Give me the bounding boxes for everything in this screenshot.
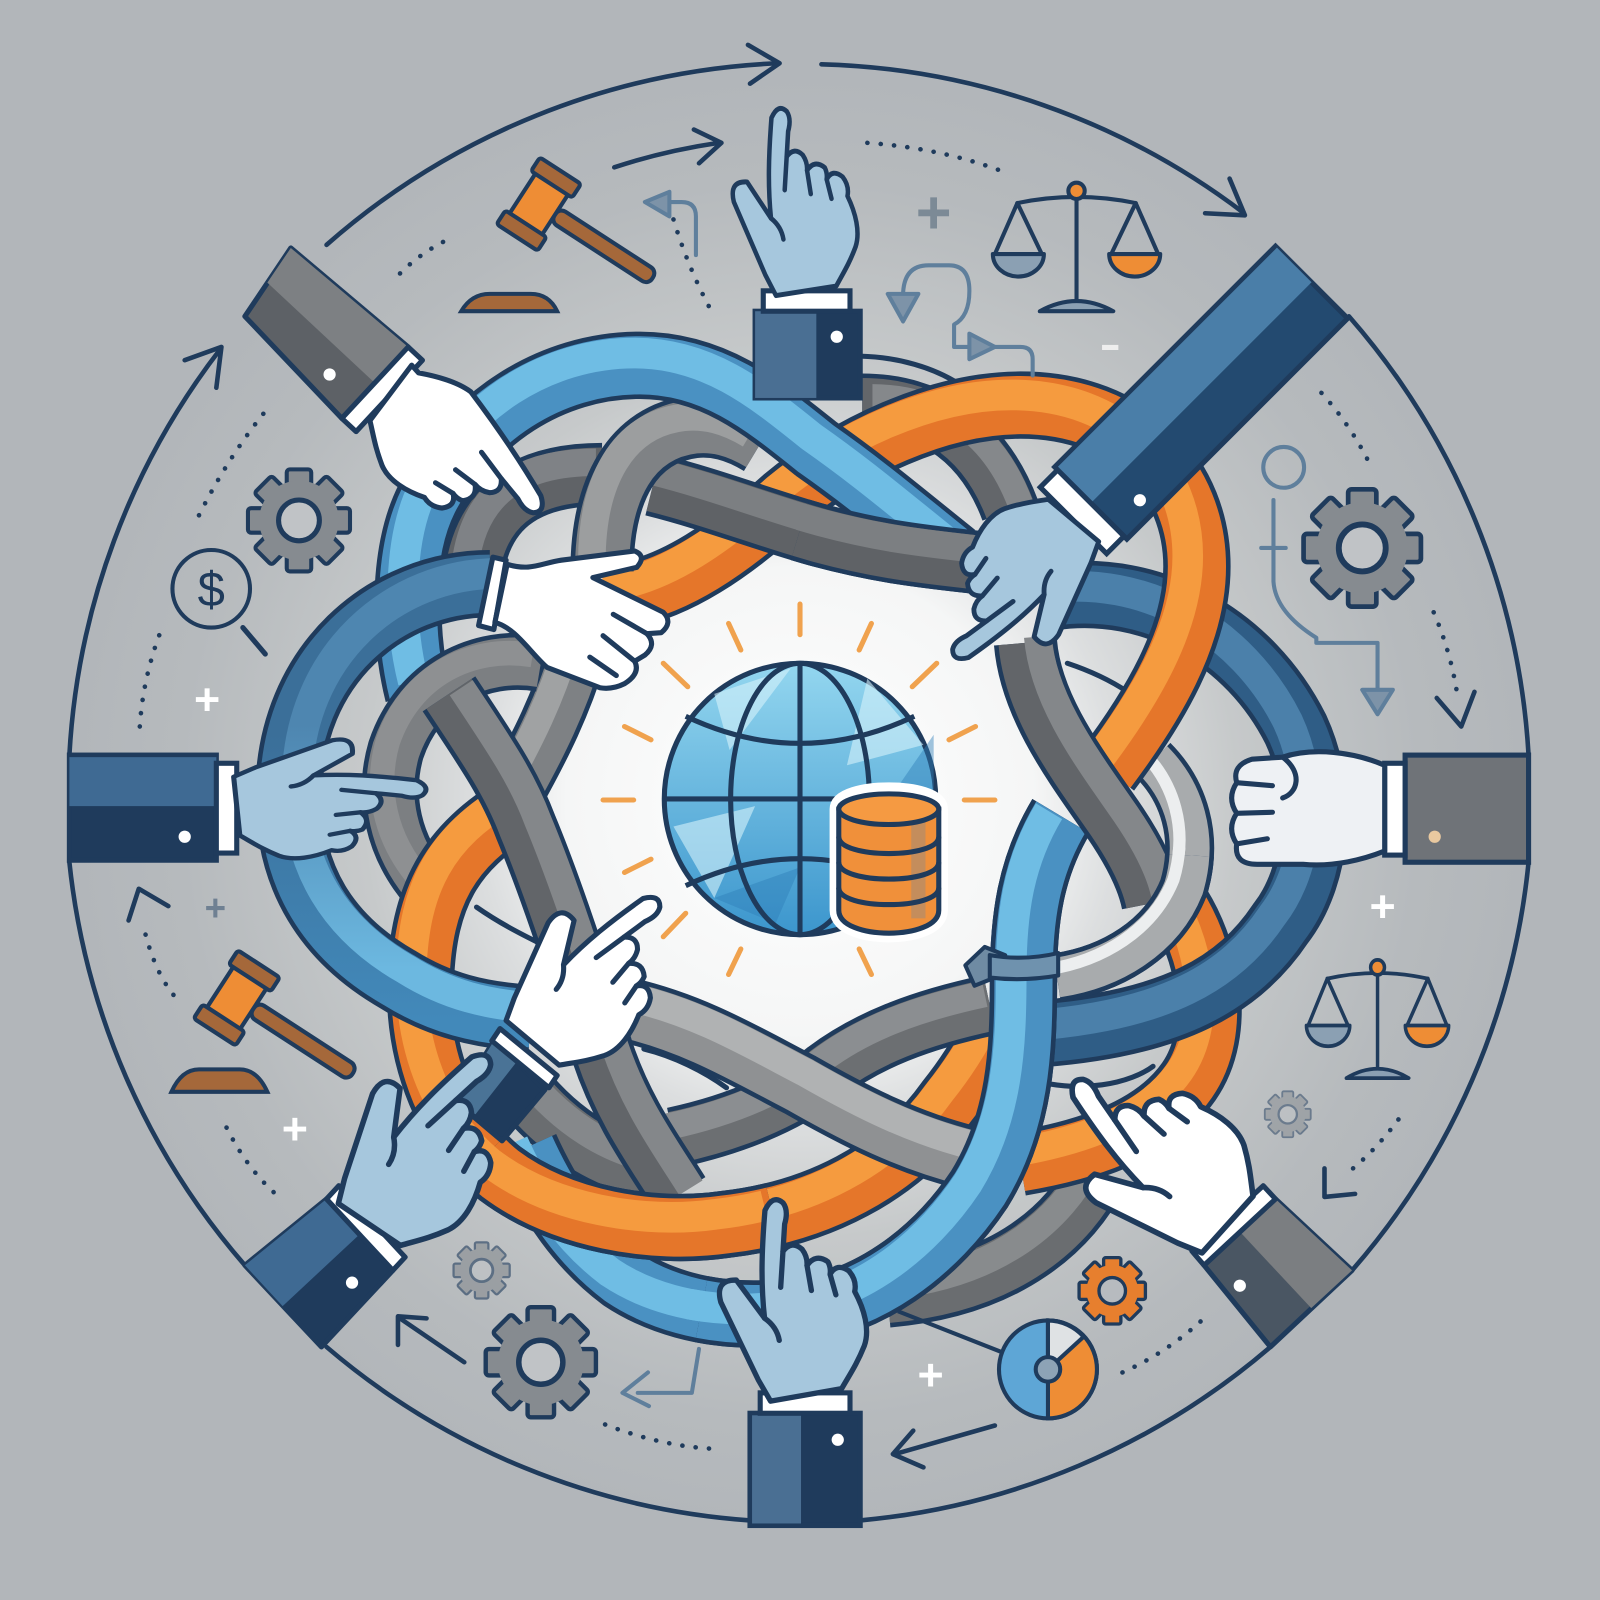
sleeve: left navy [69, 755, 237, 860]
icon: gavel top [461, 157, 674, 311]
sleeve: top navy [755, 291, 860, 398]
plus and minus marks: + [205, 887, 226, 928]
plus and minus marks: + [1370, 880, 1396, 931]
hand: top left white [350, 354, 572, 562]
sleeve: bottom navy [750, 1393, 860, 1526]
left grey strands [382, 648, 577, 888]
sleeve: bottom right grey [1192, 1186, 1352, 1347]
hand: upper left white with cuff [479, 551, 668, 688]
bottom right orange and dark blue strands [1011, 586, 1314, 1163]
back strands [465, 356, 1190, 1296]
icon: dollar magnifier [172, 550, 265, 654]
sleeve: right grey [1385, 755, 1529, 862]
hand: centre white [482, 855, 707, 1087]
dotted paths [140, 143, 1457, 1449]
globe [664, 663, 936, 935]
plus and minus marks [194, 179, 1396, 1400]
hand: bottom pale blue [705, 1188, 876, 1407]
plus and minus marks: + [916, 179, 952, 247]
sleeve: top left grey [245, 248, 422, 432]
plus and minus marks: + [918, 1349, 944, 1400]
icon: scales top [993, 183, 1160, 311]
small arrows [129, 130, 1474, 1467]
grey flow arrows [622, 192, 1393, 1406]
lower strands interlaced [289, 573, 1190, 1314]
hand: left pale blue [231, 731, 432, 864]
plus and minus marks: + [282, 1103, 308, 1154]
icon: gavel left [171, 950, 375, 1107]
icon: faint gear right [1265, 1091, 1311, 1137]
coin stack [839, 792, 939, 933]
icon: dollar magnifier: $ [198, 563, 225, 617]
sleeve: centre dark [456, 1029, 557, 1141]
icon: orange gear [1079, 1258, 1145, 1324]
icon: pie chart [898, 1311, 1097, 1418]
hand: top right pale blue [908, 478, 1121, 699]
icon: scales right [1306, 960, 1449, 1078]
hand: top pointing up [720, 99, 866, 300]
hand: right fist [1232, 752, 1385, 865]
icon: gear right [1304, 489, 1421, 607]
icon: small gear bottom [454, 1242, 510, 1298]
hand: bottom left pale blue [311, 1015, 546, 1266]
icon: gear left [248, 469, 350, 571]
top orange strand [603, 395, 1197, 770]
sun rays [603, 604, 995, 974]
sleeve: top right large blue [1037, 246, 1348, 556]
plus and minus marks: + [194, 673, 220, 724]
sleeve: bottom left navy [245, 1186, 405, 1347]
grey strand and light blue arc, upper [403, 353, 985, 694]
strap on blue strand [965, 947, 1058, 986]
icon: gear bottom [486, 1307, 596, 1417]
globe with data coins [603, 604, 995, 974]
hand: bottom right white [1024, 1029, 1278, 1278]
